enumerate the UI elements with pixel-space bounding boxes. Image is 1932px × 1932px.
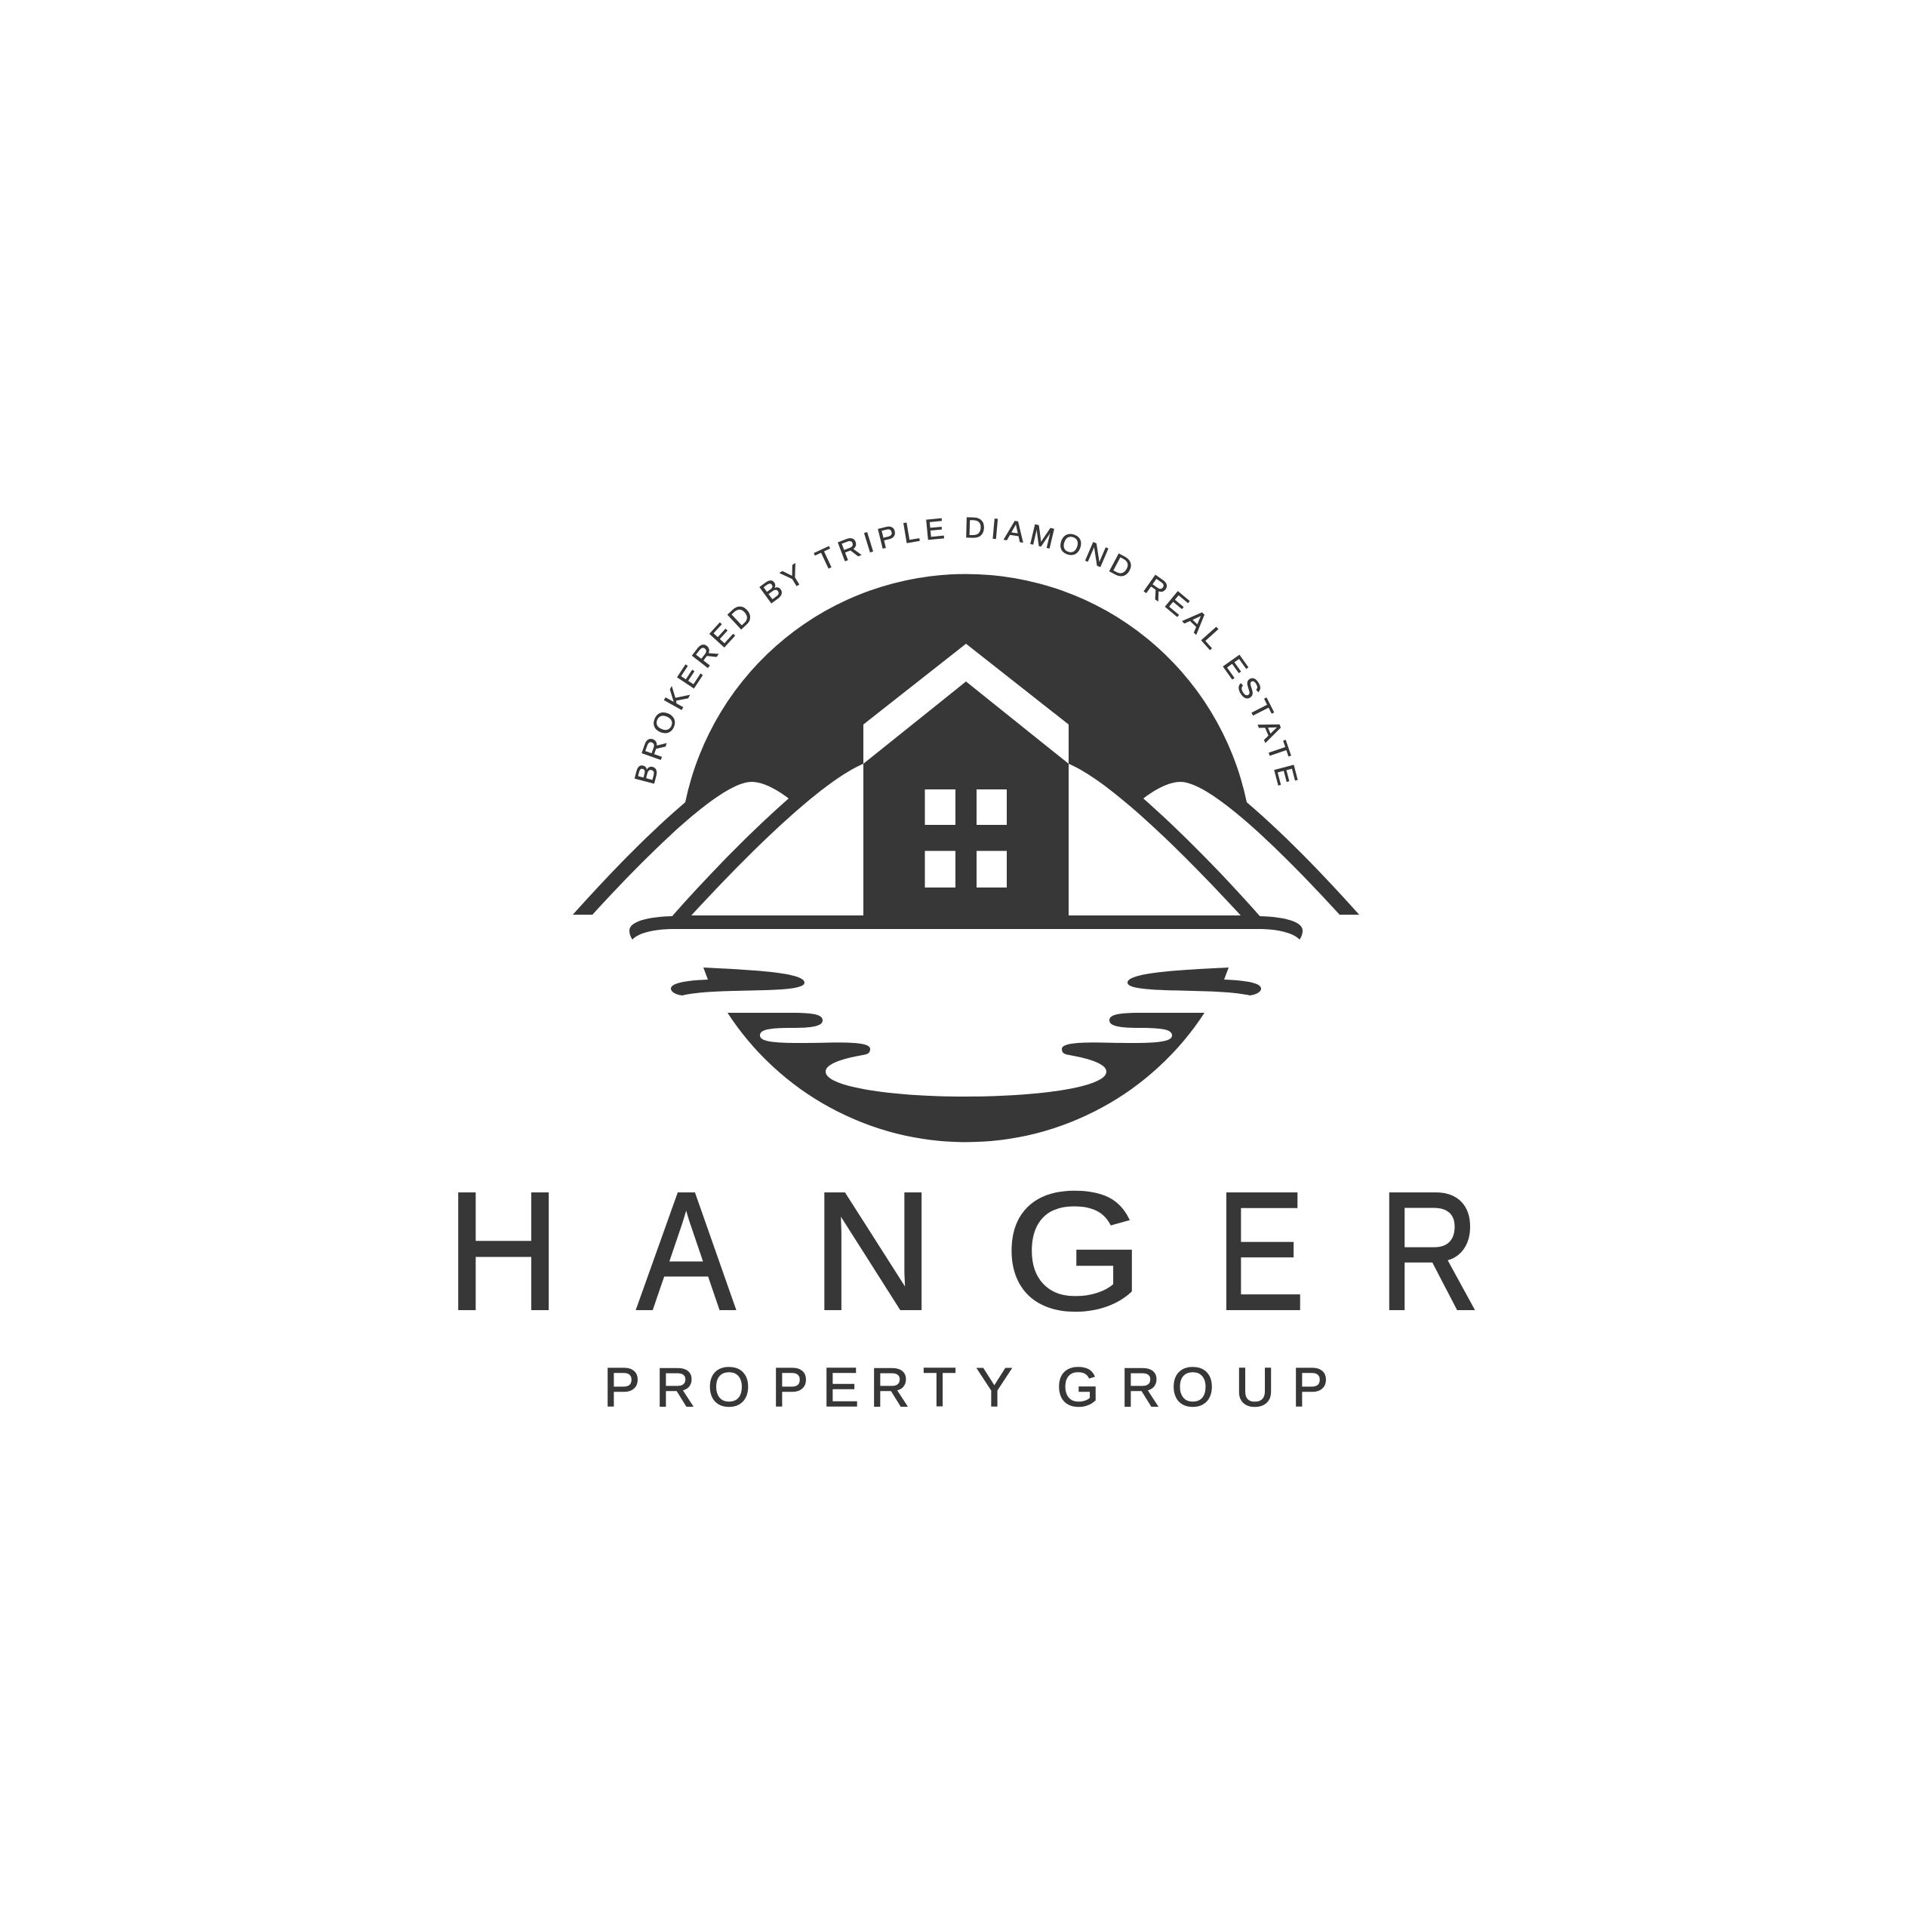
title: HANGER: A [638,1158,735,1344]
title: HANGER: E [1217,1158,1305,1345]
house windows [925,789,1007,888]
title: HANGER [447,1158,1479,1345]
title: HANGER: N [812,1158,934,1345]
subtitle: PROPERTY GROUP: PROPERTY GROUP [604,1358,1328,1418]
title: HANGER: G [1004,1158,1143,1344]
left ripple [671,968,804,995]
title: HANGER: R [1379,1158,1479,1345]
sun disc, hills and base bar [573,574,1359,940]
white slope left of house [691,764,863,915]
curved tagline: brokered by triple diamond real estate: BROKERED BY TRIPLE DIAMOND REAL ESTATE [634,517,1298,786]
lower disc with lake cutout [728,1013,1204,1142]
title: HANGER: H [447,1158,560,1344]
emblem: house, hills and sun [573,574,1359,940]
white roof band [863,644,1069,764]
white slope right of house [1069,764,1241,915]
right ripple [1128,968,1261,995]
water reflection [671,968,1261,1142]
